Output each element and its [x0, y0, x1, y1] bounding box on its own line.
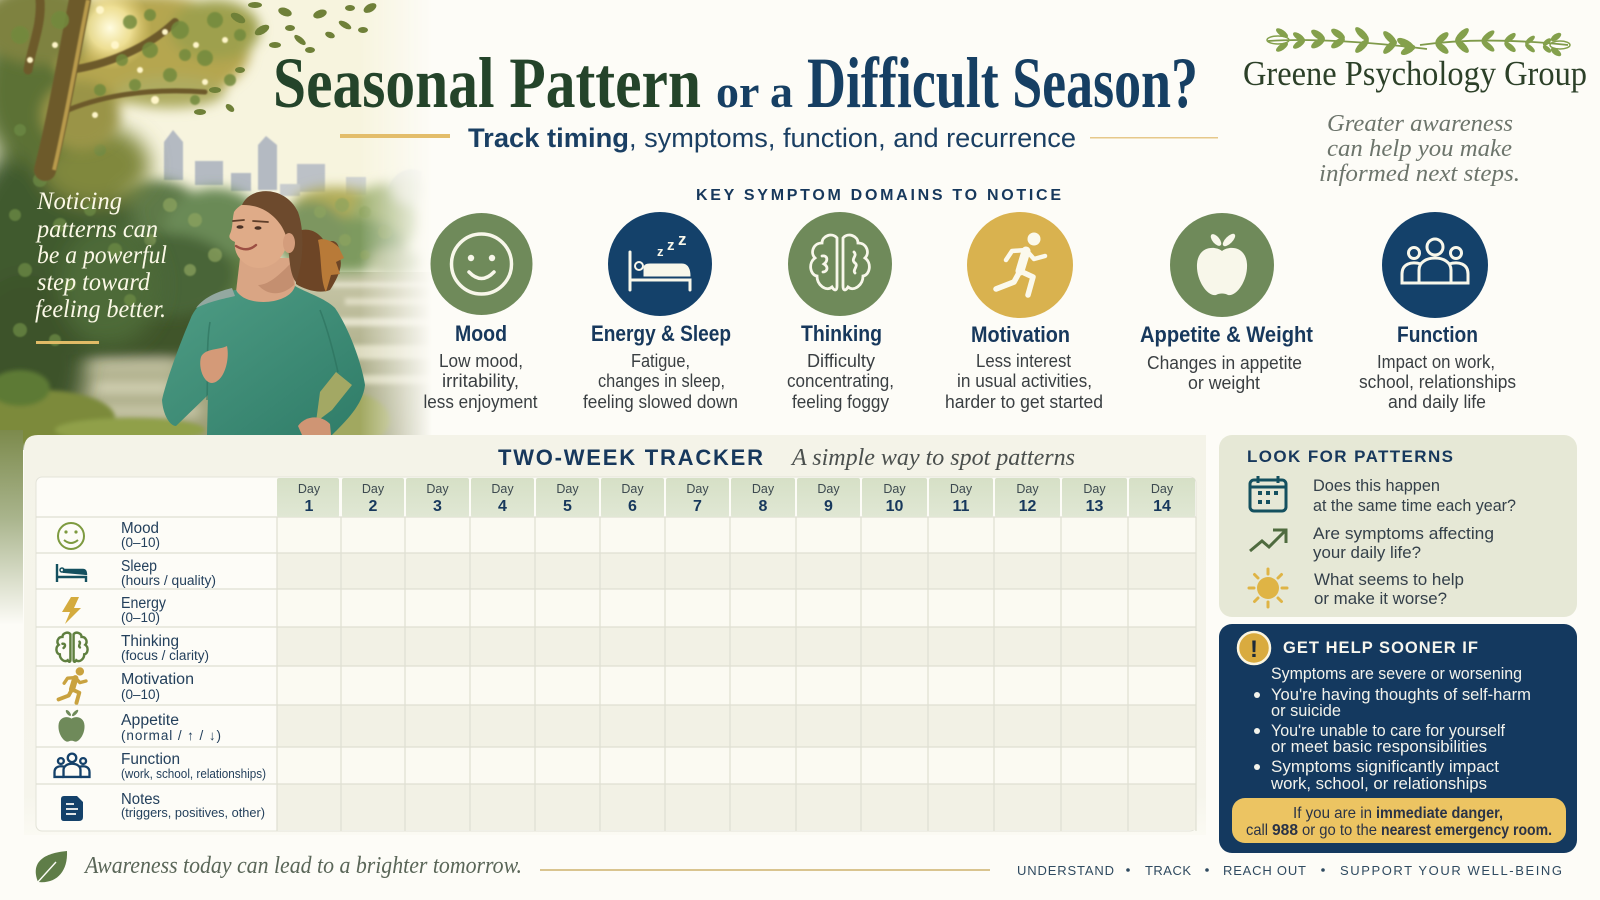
photo caption: be a powerful [37, 242, 167, 269]
icon: bed with zzz [608, 212, 712, 316]
day headers: Day [556, 482, 579, 496]
icon: runner [967, 212, 1073, 318]
callout: immediate danger: If you are in [1293, 805, 1372, 822]
day headers: Day [883, 482, 906, 496]
domain: function [1359, 212, 1516, 412]
domain: energy and sleep: feeling slowed down [583, 392, 738, 412]
row: mood [58, 520, 160, 550]
title: Difficult Season? [807, 43, 1198, 123]
icon: bed with zzz: z [657, 244, 664, 259]
day headers: 14 [1153, 498, 1171, 515]
row: energy [62, 595, 166, 625]
row: sleep: Sleep [121, 558, 157, 575]
domain: energy and sleep [583, 212, 738, 412]
icon: alert: ! [1250, 636, 1258, 663]
row: notes: Notes [121, 791, 160, 808]
footer: SUPPORT YOUR WELL-BEING [1340, 863, 1562, 878]
domain: motivation: Motivation [971, 322, 1070, 347]
domain: motivation: harder to get started [945, 392, 1103, 412]
mid trees [95, 176, 428, 317]
help list: or suicide [1271, 702, 1341, 720]
photo caption: patterns can [35, 216, 158, 243]
help list: You're having thoughts of self-harm [1271, 686, 1531, 704]
domain: motivation [945, 212, 1103, 412]
footer: Awareness today can lead to a brighter tomorrow. [83, 853, 522, 879]
day headers: Day [491, 482, 514, 496]
icon: vine [1267, 25, 1570, 58]
domain: mood [424, 213, 538, 412]
row: notes [61, 791, 265, 821]
row: mood: (0–10) [121, 535, 160, 550]
photo caption: feeling better. [35, 296, 166, 323]
row: appetite: Appetite [121, 712, 179, 729]
row: motivation: Motivation [121, 671, 194, 688]
icon: calendar [1250, 476, 1286, 511]
icon: alert [1238, 632, 1270, 664]
tagline [1319, 111, 1520, 187]
callout: immediate danger: immediate danger, [1376, 805, 1503, 822]
domain: mood: Low mood, [439, 351, 523, 371]
day headers: Day [621, 482, 644, 496]
photo caption: Noticing [36, 188, 122, 215]
domain: energy and sleep: changes in sleep, [598, 371, 725, 391]
domain: thinking: Difficulty [807, 351, 875, 371]
domain: appetite and weight [1140, 213, 1314, 393]
domain: mood: Mood [455, 321, 507, 346]
day headers: 10 [886, 498, 904, 515]
tracker heading: A simple way to spot patterns [790, 445, 1075, 471]
day headers: Day [1016, 482, 1039, 496]
icon: smiley [430, 213, 532, 315]
day headers: Day [817, 482, 840, 496]
day headers: 6 [628, 498, 637, 515]
panel: look for patterns: What seems to help [1314, 570, 1464, 589]
help list: Symptoms are severe or worsening [1271, 665, 1522, 683]
row: sleep: (hours / quality) [121, 573, 216, 588]
day headers: 8 [759, 498, 768, 515]
subtitle [340, 123, 1218, 153]
section heading: key symptom domains: KEY SYMPTOM DOMAINS TO NOTICE [696, 187, 1061, 204]
callout: immediate danger: 988 [1272, 822, 1298, 839]
icon: leaf [36, 851, 67, 883]
title: or a [716, 66, 793, 117]
footer: TRACK [1145, 863, 1191, 878]
tracker table [36, 477, 1196, 831]
icon: bed with zzz: z [667, 237, 674, 254]
domain: mood: less enjoyment [424, 392, 538, 412]
day headers [277, 478, 1195, 517]
help list: or meet basic responsibilities [1271, 738, 1487, 756]
row: function: (work, school, relationships) [121, 767, 266, 781]
callout: immediate danger: or go to the [1302, 822, 1377, 839]
day headers: 2 [369, 498, 378, 515]
callout: immediate danger: call [1246, 822, 1268, 839]
row: appetite [58, 709, 221, 743]
domain: motivation: Less interest [976, 351, 1071, 371]
photo caption: step toward [37, 269, 150, 296]
subtitle: Track timing [468, 123, 629, 153]
icon: bed with zzz: z [678, 230, 686, 249]
domain: motivation: in usual activities, [957, 371, 1092, 391]
domain: mood: irritability, [442, 371, 519, 391]
day headers: 9 [824, 498, 833, 515]
day headers: Day [1083, 482, 1106, 496]
tree trunk [28, 0, 205, 170]
day headers: Day [426, 482, 449, 496]
logo: Greene Psychology Group [1243, 25, 1587, 93]
domain: function: Function [1397, 322, 1478, 347]
row: thinking: Thinking [121, 633, 179, 650]
panel: two-week tracker [24, 435, 1206, 835]
panel: look for patterns: Are symptoms affecting [1313, 524, 1494, 543]
panel: look for patterns: or make it worse? [1314, 589, 1447, 608]
row: energy: Energy [121, 595, 166, 612]
day headers: 7 [693, 498, 702, 515]
icon: brain [788, 212, 892, 316]
panel: get help sooner: GET HELP SOONER IF [1283, 639, 1478, 657]
help list [1254, 665, 1531, 793]
row: thinking [56, 633, 209, 663]
row: function [55, 751, 266, 781]
domain: appetite and weight: Appetite & Weight [1140, 322, 1314, 347]
panel: look for patterns: your daily life? [1313, 543, 1421, 562]
help list: work, school, or relationships [1270, 775, 1487, 793]
day headers: 12 [1019, 498, 1036, 515]
row: energy: (0–10) [121, 610, 160, 625]
help list: You're unable to care for yourself [1271, 722, 1505, 740]
row: motivation [59, 667, 194, 703]
top canopy [0, 0, 260, 150]
tracker heading [498, 445, 1075, 471]
day headers: 11 [953, 498, 970, 515]
foreground bushes [0, 370, 390, 450]
domain: function: Impact on work, [1377, 352, 1495, 372]
callout: immediate danger [1232, 798, 1566, 843]
domain: thinking: feeling foggy [792, 392, 889, 412]
day headers: Day [950, 482, 973, 496]
day headers: Day [298, 482, 321, 496]
row: function: Function [121, 751, 180, 768]
subtitle: , symptoms, function, and recurrence [629, 123, 1076, 153]
domain: appetite and weight: or weight [1188, 373, 1260, 393]
left edge strip below photo [0, 430, 23, 625]
day headers: 13 [1086, 498, 1104, 515]
domain: appetite and weight: Changes in appetite [1147, 353, 1302, 373]
day headers: 1 [305, 498, 314, 515]
icon: apple [1170, 213, 1274, 317]
scattered leaves over sky [194, 1, 378, 115]
callout: immediate danger: nearest emergency room. [1381, 822, 1552, 839]
tagline: can help you make [1327, 136, 1512, 162]
woman [162, 191, 365, 435]
water [60, 272, 440, 440]
footer: REACH OUT [1223, 863, 1306, 878]
row: appetite: (normal / ↑ / ↓) [121, 728, 221, 743]
day headers: Day [686, 482, 709, 496]
day headers: Day [1151, 482, 1174, 496]
domain: energy and sleep: Fatigue, [631, 351, 690, 371]
footer: UNDERSTAND [1017, 863, 1114, 878]
panel: look for patterns: at the same time each year? [1313, 496, 1516, 515]
icon: trend arrow [1250, 530, 1286, 551]
photo caption [35, 188, 167, 344]
skyline [163, 130, 366, 196]
panel: get help sooner [1219, 624, 1577, 853]
day headers: 5 [563, 498, 572, 515]
icon: sun [1249, 569, 1287, 607]
help list: Symptoms significantly impact [1271, 758, 1499, 776]
tagline: informed next steps. [1319, 161, 1520, 187]
tracker heading: TWO-WEEK TRACKER [498, 445, 763, 470]
domain: energy and sleep: Energy & Sleep [591, 321, 731, 346]
row: thinking: (focus / clarity) [121, 648, 209, 663]
day headers: Day [752, 482, 775, 496]
footer [36, 851, 1562, 883]
domain: function: and daily life [1388, 392, 1486, 412]
panel: look for patterns: LOOK FOR PATTERNS [1247, 447, 1453, 466]
row: mood: Mood [121, 520, 159, 537]
day headers: 3 [433, 498, 442, 515]
icon: people [1382, 212, 1488, 318]
domain: function: school, relationships [1359, 372, 1516, 392]
domain: thinking: Thinking [801, 321, 882, 346]
title: Seasonal Pattern [273, 43, 701, 123]
panel: look for patterns [1219, 435, 1577, 617]
title [273, 43, 1198, 123]
domain: thinking: concentrating, [787, 371, 894, 391]
tagline: Greater awareness [1327, 111, 1513, 137]
row: sleep [57, 558, 216, 588]
panel: look for patterns: Does this happen [1313, 476, 1440, 495]
domain: thinking [787, 212, 894, 412]
day headers: Day [362, 482, 385, 496]
row: notes: (triggers, positives, other) [121, 805, 265, 820]
day headers: 4 [498, 498, 507, 515]
row: motivation: (0–10) [121, 687, 160, 702]
left dark foliage [0, 15, 160, 445]
photo: runner in park with skyline [0, 0, 450, 625]
